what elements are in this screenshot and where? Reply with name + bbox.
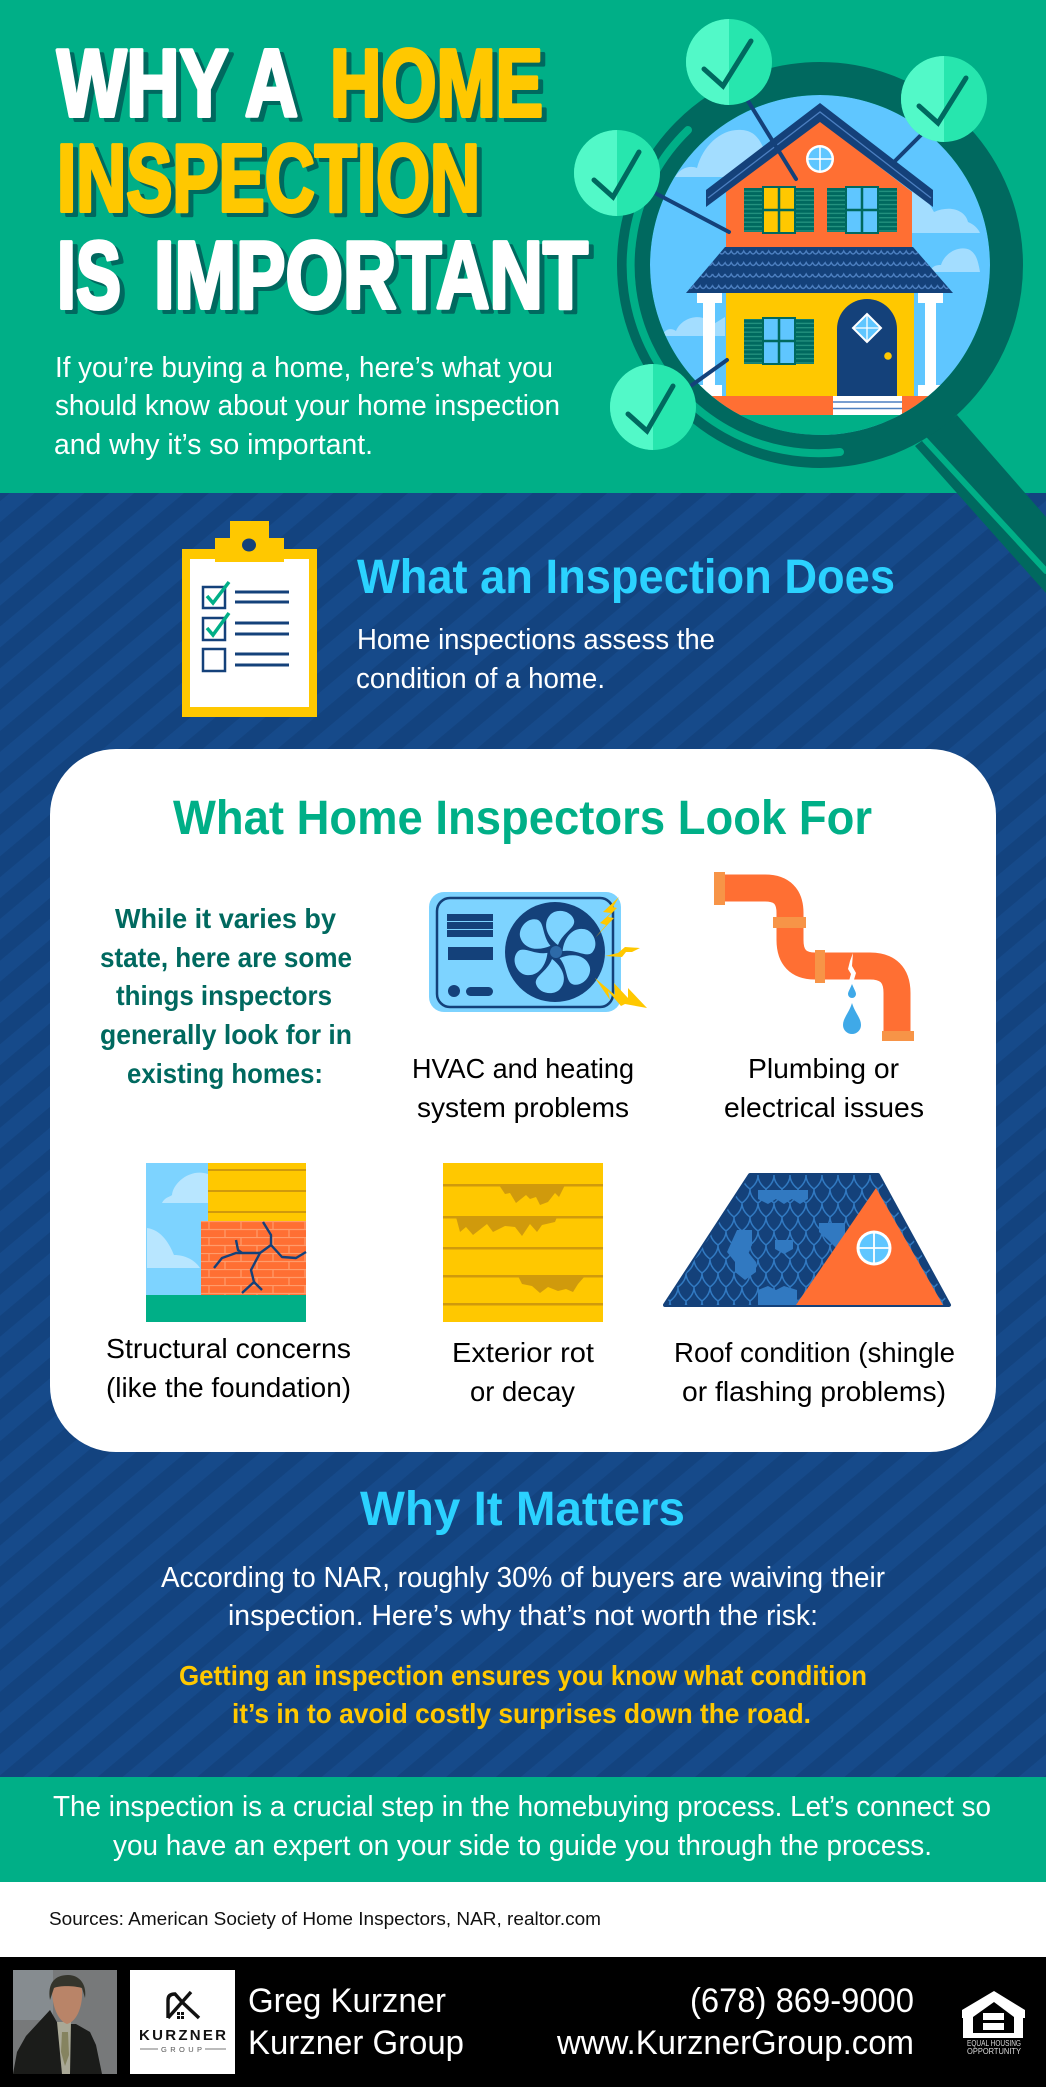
label: exterior: Exterior rot	[452, 1337, 594, 1368]
navy striped background	[0, 493, 1046, 1777]
intro text: and why it’s so important.	[54, 429, 373, 461]
intro text: If you’re buying a home, here’s what you	[55, 352, 553, 384]
call to action band: The inspection is a crucial step in the homebuying process. Let’s connect so	[53, 1791, 991, 1823]
magnifier ring	[634, 78, 1006, 452]
header band	[0, 0, 1046, 493]
contact details: (678) 869-9000	[690, 1982, 914, 2020]
title: IMPORTANT	[154, 222, 588, 329]
label: roof: Roof condition (shingle	[674, 1337, 955, 1368]
agent photo	[13, 1970, 117, 2074]
text: what an inspection does: condition of a home.	[356, 663, 605, 695]
agent name: Kurzner Group	[248, 2024, 464, 2062]
heading: look for: What Home Inspectors Look For	[173, 792, 872, 845]
intro text: generally look for in	[100, 1019, 352, 1050]
check badge left	[574, 130, 660, 216]
text: what an inspection does	[356, 624, 715, 695]
title: IS	[62, 226, 126, 333]
icon: roof	[662, 1175, 952, 1305]
heading: what an inspection does: What an Inspection Does	[357, 551, 895, 604]
intro text: While it varies by	[115, 903, 336, 934]
label: HVAC: system problems	[417, 1092, 629, 1123]
intro text: things inspectors	[116, 980, 332, 1011]
sources: Sources: American Society of Home Inspectors, NAR, realtor.com	[49, 1908, 601, 1929]
contact details: www.KurznerGroup.com	[556, 2024, 914, 2062]
title: INSPECTION	[57, 125, 480, 232]
company logo: GROUP	[161, 2045, 202, 2054]
callout: yellow statement	[179, 1660, 867, 1729]
callout: yellow statement: it’s in to avoid costly surprises down the road.	[232, 1698, 811, 1729]
label: structural: (like the foundation)	[106, 1372, 351, 1403]
intro text: state, here are some	[100, 942, 352, 973]
icon: clipboard	[182, 521, 317, 717]
label: plumbing: Plumbing or	[748, 1053, 899, 1084]
label: HVAC: HVAC and heating	[412, 1053, 634, 1084]
title: WHY A	[62, 34, 303, 141]
footer bar	[0, 1957, 1046, 2087]
call to action band	[0, 1777, 1046, 1882]
check badge right	[901, 56, 987, 142]
icon: HVAC unit	[429, 892, 647, 1012]
text: why it matters	[161, 1562, 885, 1632]
title: IMPORTANT	[159, 226, 593, 333]
text: why it matters: According to NAR, roughly 30% of buyers are waiving their	[161, 1562, 885, 1594]
intro text	[100, 903, 352, 1089]
company logo: KURZNER	[139, 2027, 226, 2044]
label: plumbing	[724, 1053, 924, 1123]
leader lines	[655, 101, 922, 385]
label: plumbing: electrical issues	[724, 1092, 924, 1123]
heading: why it matters: Why It Matters	[360, 1483, 685, 1536]
contact details	[556, 1982, 914, 2062]
check badge bottom	[610, 364, 696, 450]
agent name: Greg Kurzner	[248, 1982, 446, 2020]
icon: rotting siding	[443, 1163, 603, 1322]
agent name	[248, 1982, 464, 2062]
title: HOME	[330, 30, 543, 137]
intro text: should know about your home inspection	[55, 390, 560, 422]
lens with house	[640, 90, 1000, 445]
company logo	[130, 1970, 235, 2074]
icon: cracked wall	[146, 1163, 306, 1322]
label: exterior: or decay	[470, 1376, 575, 1407]
call to action band: you have an expert on your side to guide you through the process.	[113, 1830, 932, 1862]
title: WHY A	[57, 30, 298, 137]
title: HOME	[335, 34, 548, 141]
intro text: existing homes:	[127, 1058, 323, 1089]
icon: equal housing opportunity	[962, 1991, 1025, 2056]
icon: equal housing opportunity: EQUAL HOUSING	[967, 2039, 1021, 2048]
title: INSPECTION	[62, 129, 485, 236]
magnifier handle	[915, 415, 1046, 593]
text: what an inspection does: Home inspections assess the	[357, 624, 715, 656]
text: why it matters: inspection. Here’s why that’s not worth the risk:	[228, 1600, 818, 1632]
label: roof: or flashing problems)	[682, 1376, 946, 1407]
icon: equal housing opportunity: OPPORTUNITY	[967, 2047, 1022, 2056]
label: exterior	[452, 1337, 594, 1407]
intro text	[54, 352, 560, 461]
label: structural: Structural concerns	[106, 1333, 351, 1364]
title: IS	[57, 222, 121, 329]
check badge top	[686, 19, 772, 105]
icon: magnifying glass with house	[574, 19, 1046, 593]
title	[57, 30, 593, 333]
icon: leaking pipe	[714, 872, 914, 1041]
panel: what home inspectors look for	[50, 749, 996, 1452]
label: roof	[674, 1337, 955, 1407]
label: HVAC	[412, 1053, 634, 1123]
callout: yellow statement: Getting an inspection ensures you know what condition	[179, 1660, 867, 1691]
ring highlight	[631, 130, 840, 453]
label: structural	[106, 1333, 351, 1403]
